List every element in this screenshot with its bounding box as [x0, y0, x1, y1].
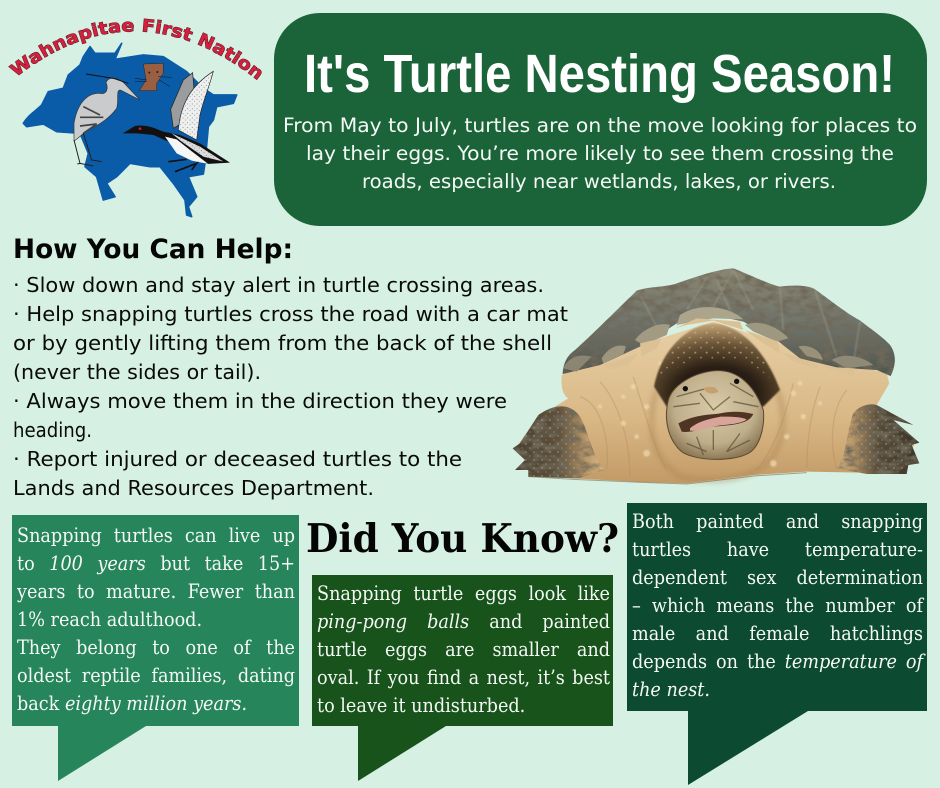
lifespan text: years to mature. Fewer than: [17, 580, 295, 603]
bubble shape: [312, 575, 613, 781]
heading: How You Can Help:: [13, 234, 293, 265]
lifespan text: They belong to one of the: [17, 636, 295, 659]
help list: [13, 273, 568, 500]
turtle head: [666, 371, 764, 459]
temperature text: dependent sex determination: [632, 566, 923, 589]
panel: how you can help: [13, 234, 568, 500]
logo marten: [135, 63, 172, 91]
intro text: From May to July, turtles are on the move looking for places to: [283, 114, 917, 137]
panel: fact bubble lifespan: [12, 515, 299, 781]
temperature text: the nest.: [632, 678, 710, 701]
lifespan text: back eighty million years.: [17, 692, 247, 715]
banner background: [274, 13, 927, 226]
eggs text: Snapping turtle eggs look like: [317, 582, 610, 605]
turtle ground shadow: [528, 473, 807, 484]
help list: · Help snapping turtles cross the road with a car mat: [13, 302, 568, 326]
illustration: snapping turtle: [512, 268, 920, 486]
turtle left leg: [513, 406, 605, 478]
logo loon: [123, 71, 230, 172]
intro text: roads, especially near wetlands, lakes, or rivers.: [362, 170, 836, 193]
temperature text: [632, 510, 926, 701]
turtle body: [517, 322, 915, 483]
help list: (never the sides or tail).: [13, 360, 261, 384]
intro text: [283, 114, 917, 193]
turtle neck hood: [654, 323, 780, 407]
help list: heading.: [13, 418, 92, 442]
bubble shape: [627, 503, 927, 785]
temperature text: depends on the temperature of: [632, 650, 923, 673]
lifespan text: oldest reptile families, dating: [17, 664, 295, 687]
logo: Wahnapitae First Nation: [8, 18, 262, 218]
panel: fact bubble eggs: [312, 575, 613, 781]
help list: Lands and Resources Department.: [13, 476, 374, 500]
temperature text: turtles have temperature-: [632, 538, 923, 561]
bubble shape: [12, 515, 299, 781]
logo heron: [74, 74, 140, 166]
panel: fact bubble temperature: [627, 503, 927, 785]
heading: did you know: Did You Know?: [306, 516, 619, 562]
intro text: lay their eggs. You’re more likely to see them crossing the: [306, 142, 894, 165]
logo map shape: [23, 43, 237, 217]
temperature text: – which means the number of: [632, 594, 923, 617]
turtle right leg: [837, 404, 919, 474]
help list: · Always move them in the direction they were: [13, 389, 507, 413]
temperature text: Both painted and snapping: [632, 510, 923, 533]
temperature text: male and female hatchlings: [632, 622, 923, 645]
lifespan text: [16, 524, 295, 715]
help list: or by gently lifting them from the back of the shell: [13, 331, 552, 355]
help list: · Slow down and stay alert in turtle crossing areas.: [13, 273, 544, 297]
lifespan text: to 100 years but take 15+: [17, 552, 295, 575]
eggs text: to leave it undisturbed.: [317, 694, 525, 717]
lifespan text: Snapping turtles can live up: [17, 524, 295, 547]
turtle shell: [563, 268, 895, 377]
panel: title banner: [274, 13, 927, 226]
help list: · Report injured or deceased turtles to the: [13, 447, 462, 471]
logo arc lettering: Wahnapitae First Nation: [8, 18, 262, 80]
eggs text: ping-pong balls and painted: [317, 610, 610, 633]
lifespan text: 1% reach adulthood.: [17, 608, 202, 631]
eggs text: [317, 582, 610, 717]
eggs text: turtle eggs are smaller and: [317, 638, 610, 661]
eggs text: oval. If you find a nest, it’s best: [317, 666, 610, 689]
